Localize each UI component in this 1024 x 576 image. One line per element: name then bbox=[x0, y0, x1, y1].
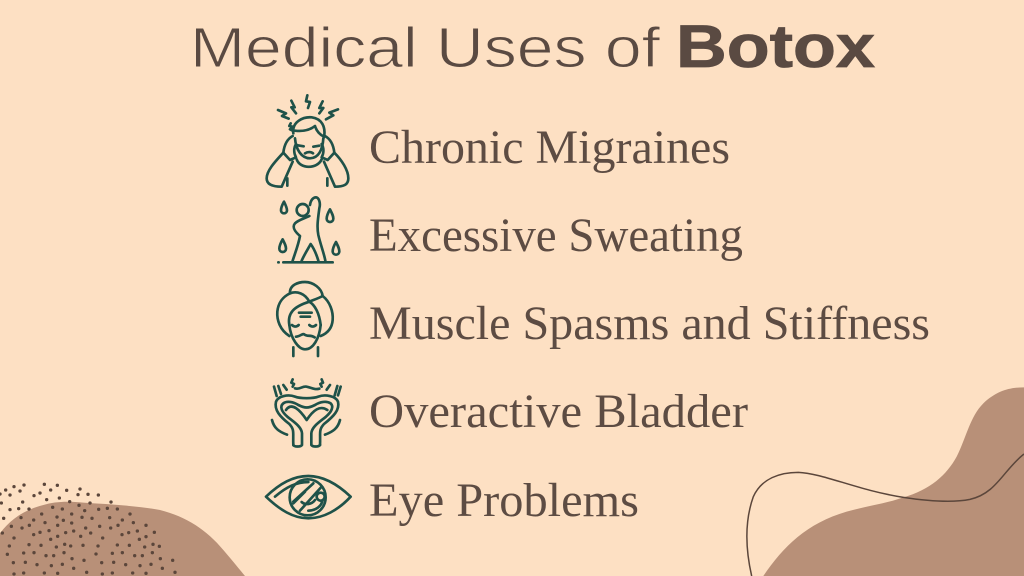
title: Medical Uses of bbox=[190, 16, 660, 80]
icon: bladder bbox=[272, 379, 341, 446]
icon: face with turban bbox=[277, 282, 333, 356]
list labels bbox=[369, 121, 930, 527]
label: eye problems: Eye Problems bbox=[369, 474, 639, 527]
label: muscle spasms: Muscle Spasms and Stiffness bbox=[369, 297, 930, 350]
label: chronic migraines: Chronic Migraines bbox=[369, 121, 730, 174]
icon: eye bbox=[266, 476, 351, 518]
title bbox=[190, 13, 875, 80]
label: overactive bladder: Overactive Bladder bbox=[369, 385, 748, 438]
title: Botox bbox=[676, 13, 875, 80]
label: excessive sweating: Excessive Sweating bbox=[369, 209, 743, 262]
left decorative blob with dots bbox=[0, 484, 245, 576]
icon: headache bbox=[267, 95, 348, 187]
right decorative blob with line bbox=[747, 387, 1024, 576]
icon: sweating bbox=[278, 197, 339, 262]
